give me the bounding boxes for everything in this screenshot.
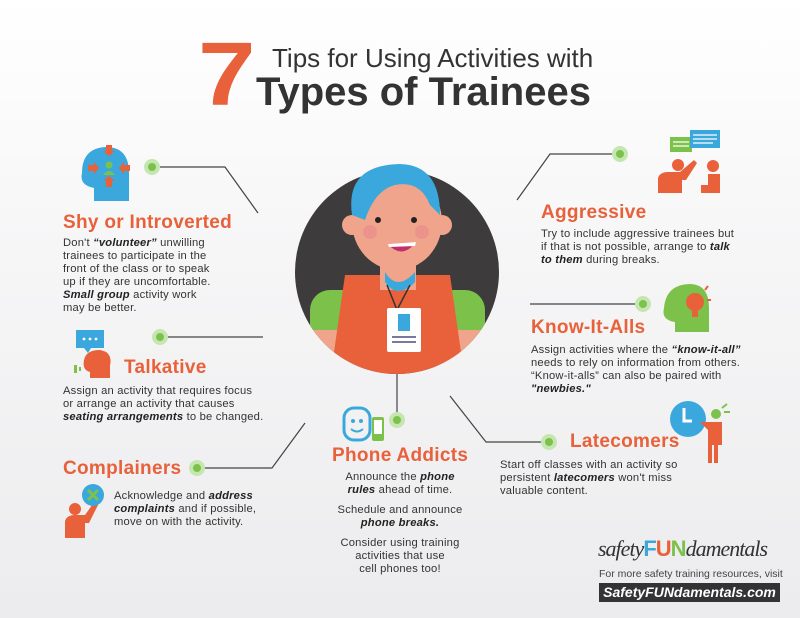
heading: Phone Addicts [332,445,468,466]
panel: talkative [63,330,263,423]
central character [295,164,499,374]
title: 7 [198,25,256,125]
text: up if they are uncomfortable. [63,276,211,288]
text [500,459,678,497]
panel: complainers [63,458,256,538]
text: to them during breaks. [541,254,660,266]
text: needs to rely on information from others. [531,357,740,369]
icon: head with bulb [664,284,711,332]
text: Start off classes with an activity so [500,459,678,471]
text [63,385,263,423]
text: seating arrangements to be changed. [63,411,263,423]
text: may be better. [63,302,137,314]
logo: safetyFUNdamentals: safetyFUNdamentals [598,536,767,561]
text [531,344,741,395]
text [541,228,734,266]
panel: shy or introverted [63,145,232,314]
panel: aggressive [541,130,734,266]
panel: know-it-alls [531,284,741,395]
text: Assign activities where the “know-it-all” [531,344,741,356]
text: phone breaks. Consider using training [340,517,460,549]
text: Assign an activity that requires focus [63,385,252,397]
icon: head with arrows [82,145,130,201]
text: Acknowledge and address [114,490,253,502]
text: Don't “volunteer” unwilling [63,237,205,249]
panel: latecomers [500,401,730,497]
text: “Know-it-alls” can also be paired with [531,370,721,382]
title: Types of Trainees [256,70,591,114]
text: or arrange an activity that causes [63,398,235,410]
text: activities that use [355,550,445,562]
heading: Complainers [63,458,181,479]
text: if that is not possible, arrange to talk [541,241,730,253]
text: cell phones too! [359,563,441,575]
text: Announce the phone [345,471,455,483]
icon: clock and person [670,401,730,463]
icon: talking head [74,330,111,378]
logo: safetyFUNdamentals: SafetyFUNdamentals.com [603,584,776,600]
text: front of the class or to speak [63,263,210,275]
heading: Shy or Introverted [63,212,232,233]
icon: complainer [65,484,104,538]
text: move on with the activity. [114,516,243,528]
text [114,490,256,528]
heading: Know-It-Alls [531,317,645,338]
title [198,25,593,125]
heading: Aggressive [541,202,646,223]
title: Tips for Using Activities with [272,43,593,73]
text: rules ahead of time. Schedule and announce [338,484,462,516]
heading: Talkative [124,357,207,378]
logo: safetyFUNdamentals [598,536,783,602]
text: Try to include aggressive trainees but [541,228,734,240]
icon: two people arguing [658,130,720,193]
text: trainees to participate in the [63,250,206,262]
icon: face with phone [342,406,384,442]
text: "newbies." [531,383,591,395]
text: valuable content. [500,485,588,497]
panel: phone addicts [332,406,468,575]
text: persistent latecomers won't miss [500,472,672,484]
text [63,237,211,314]
text: complaints and if possible, [114,503,256,515]
text [338,471,462,575]
heading: Latecomers [570,431,680,452]
logo: safetyFUNdamentals: For more safety training resources, visit [599,568,783,580]
text: Small group activity work [63,289,197,301]
